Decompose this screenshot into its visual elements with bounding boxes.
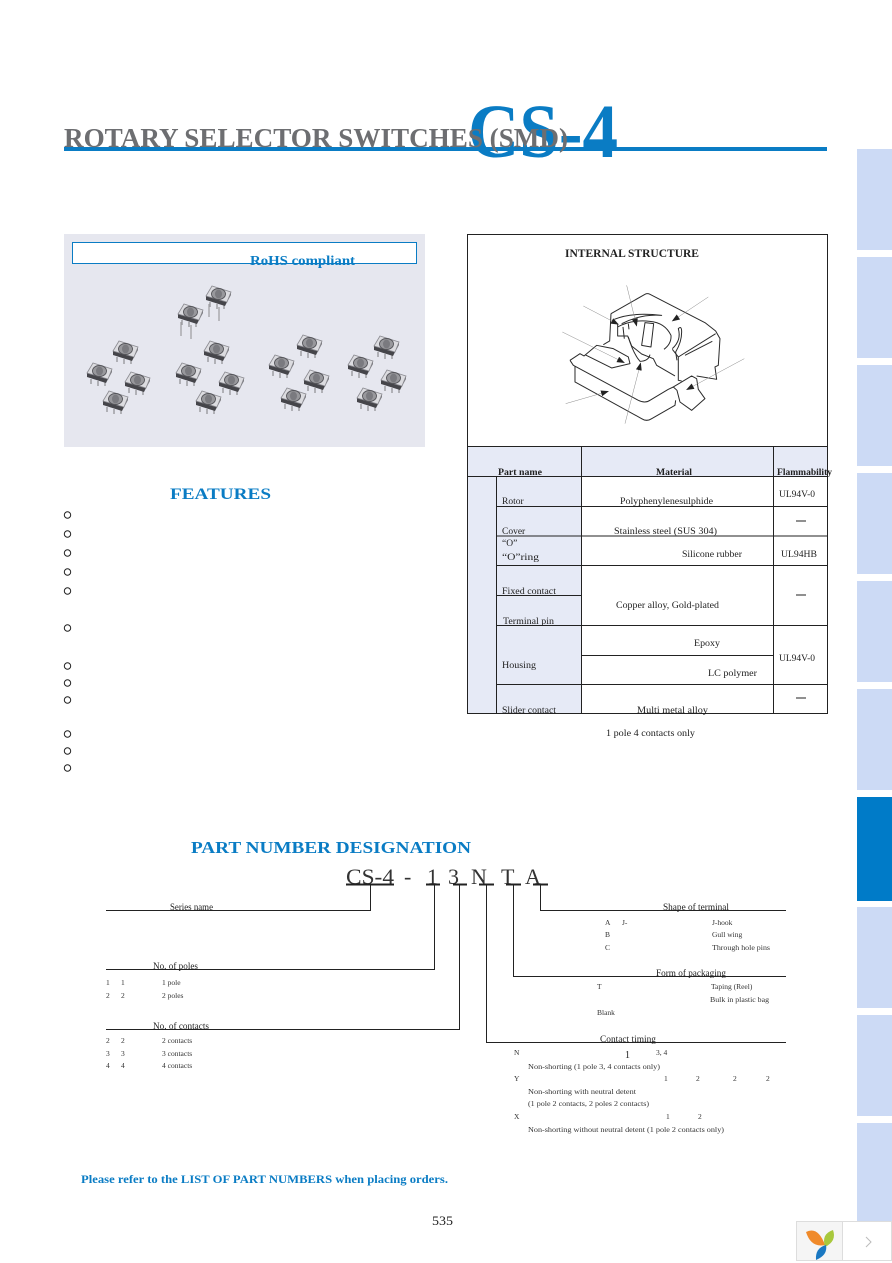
number of contacts: 3: [121, 1049, 125, 1058]
part names: Fixed contact: [502, 587, 556, 597]
leader arrows: [562, 285, 744, 424]
internal structure diagram: [562, 285, 744, 424]
form of packaging: T: [597, 982, 602, 991]
table grid: [467, 234, 828, 714]
materials: Polyphenylenesulphide: [620, 497, 713, 507]
through-hole switches: [178, 286, 231, 339]
RoHS box: [72, 242, 416, 264]
materials: Multi metal alloy: [637, 706, 708, 716]
panel: product photo: [64, 234, 425, 447]
designation heading: PART NUMBER DESIGNATION: [191, 838, 472, 857]
contact timing: X: [514, 1112, 520, 1121]
table header: Part name: [498, 468, 542, 478]
part names: Cover: [502, 527, 526, 537]
part number code: N: [471, 864, 487, 889]
number of poles: 2 poles: [162, 991, 184, 1000]
contact timing: 1: [666, 1112, 670, 1121]
materials: Stainless steel (SUS 304): [614, 526, 717, 537]
table shading: [467, 447, 827, 713]
shape of terminal: Gull wing: [712, 930, 742, 939]
contact timing: 2: [733, 1074, 737, 1083]
number of contacts: 2 contacts: [162, 1036, 192, 1045]
features: [64, 486, 271, 771]
ordering note: Please refer to the LIST OF PART NUMBERS when placing orders.: [81, 1174, 448, 1186]
part number code: A: [525, 864, 541, 889]
number of poles: 2: [121, 991, 125, 1000]
form of packaging: Blank: [597, 1008, 615, 1017]
switch group 3: [269, 335, 329, 411]
table header: Material: [656, 468, 692, 478]
contact timing: 2: [698, 1112, 702, 1121]
number of poles: No. of poles: [153, 961, 198, 972]
number of contacts: 2: [106, 1036, 110, 1045]
number of poles: 1: [106, 978, 110, 987]
shape of terminal: B: [605, 930, 610, 939]
number of poles: 2: [106, 991, 110, 1000]
part number code: 3: [448, 864, 459, 889]
number of contacts: 2: [121, 1036, 125, 1045]
part names: “O”ring: [502, 553, 539, 563]
RoHS label: RoHS compliant: [250, 253, 356, 268]
form of packaging: Bulk in plastic bag: [710, 995, 769, 1004]
part names: Terminal pin: [503, 617, 554, 627]
materials: Epoxy: [694, 639, 720, 649]
contact timing: 1: [664, 1074, 668, 1083]
structure heading: INTERNAL STRUCTURE: [565, 248, 699, 260]
number of contacts: 4: [121, 1061, 125, 1070]
switch group 1: [87, 341, 150, 414]
panel: internal structure and materials table: [467, 234, 832, 716]
code underlines: [346, 884, 548, 886]
part names: [502, 497, 556, 716]
number of poles: 1 pole: [162, 978, 181, 987]
number of poles: 1: [121, 978, 125, 987]
part number code: -: [404, 864, 411, 889]
flammability: [779, 490, 817, 698]
contact timing: (1 pole 2 contacts, 2 poles 2 contacts): [528, 1099, 650, 1108]
part names: Slider contact: [502, 706, 556, 716]
number of contacts: 4: [106, 1061, 110, 1070]
part number code: [346, 864, 541, 889]
shape of terminal: [605, 902, 770, 952]
number of contacts: No. of contacts: [153, 1021, 209, 1032]
part names: Rotor: [502, 497, 524, 507]
viewer widget: [796, 1222, 892, 1260]
materials: Silicone rubber: [682, 550, 743, 560]
connector lines: [106, 884, 786, 1042]
materials: [614, 497, 758, 716]
contact timing: Non-shorting without neutral detent (1 pole 2 contacts only): [528, 1125, 725, 1134]
icon: chevron: [866, 1237, 871, 1247]
switch group 2: [176, 341, 244, 414]
shape of terminal: Shape of terminal: [663, 902, 729, 913]
flammability: UL94V-0: [779, 490, 815, 500]
series name: Series name: [170, 903, 213, 913]
contact timing: Y: [514, 1074, 520, 1083]
shape of terminal: A: [605, 918, 611, 927]
part number code: CS-4: [346, 864, 394, 889]
contact timing: 3, 4: [656, 1048, 668, 1057]
table footnote: 1 pole 4 contacts only: [606, 729, 695, 739]
table header: [498, 468, 832, 478]
contact timing: 2: [766, 1074, 770, 1083]
feature bullets: [64, 512, 71, 771]
title rule: [64, 147, 827, 151]
page number: 535: [432, 1213, 453, 1228]
form of packaging: Taping (Reel): [711, 982, 753, 991]
flammability: UL94HB: [781, 550, 817, 560]
part number designation: [106, 838, 786, 1134]
contact timing: 1: [625, 1050, 630, 1061]
number of contacts: 3: [106, 1049, 110, 1058]
contact timing: Contact timing: [600, 1035, 656, 1045]
shape of terminal: J-hook: [712, 918, 733, 927]
contact timing: Non-shorting (1 pole 3, 4 contacts only): [528, 1062, 661, 1071]
series title: [64, 90, 827, 174]
shape of terminal: Through hole pins: [712, 943, 770, 952]
materials: Copper alloy, Gold-plated: [616, 601, 719, 611]
contact timing: 2: [696, 1074, 700, 1083]
flammability: UL94V-0: [779, 654, 815, 664]
contact timing: [514, 1035, 770, 1134]
part names: Housing: [502, 661, 536, 671]
form of packaging: Form of packaging: [656, 968, 726, 979]
part names: “O”: [502, 539, 517, 549]
shape of terminal: C: [605, 943, 610, 952]
part number code: T: [501, 864, 515, 889]
number of contacts: 3 contacts: [162, 1049, 192, 1058]
part number code: 1: [427, 864, 438, 889]
icon: logo: [806, 1230, 834, 1260]
number of contacts: 4 contacts: [162, 1061, 192, 1070]
heading: rotary selector switches: ROTARY SELECTOR SWITCHES (SMD): [64, 123, 568, 153]
features heading: FEATURES: [170, 486, 271, 503]
shape of terminal: J-: [622, 918, 628, 927]
materials: LC polymer: [708, 669, 758, 679]
side tabs: [857, 149, 892, 1221]
number of contacts: [106, 1021, 209, 1070]
table header: Flammability: [777, 468, 832, 478]
contact timing: N: [514, 1048, 520, 1057]
number of poles: [106, 961, 198, 1000]
contact timing: Non-shorting with neutral detent: [528, 1087, 637, 1096]
heading: CS-4: CS-4: [468, 90, 618, 174]
form of packaging: [597, 968, 769, 1017]
switch group 4: [348, 336, 406, 411]
